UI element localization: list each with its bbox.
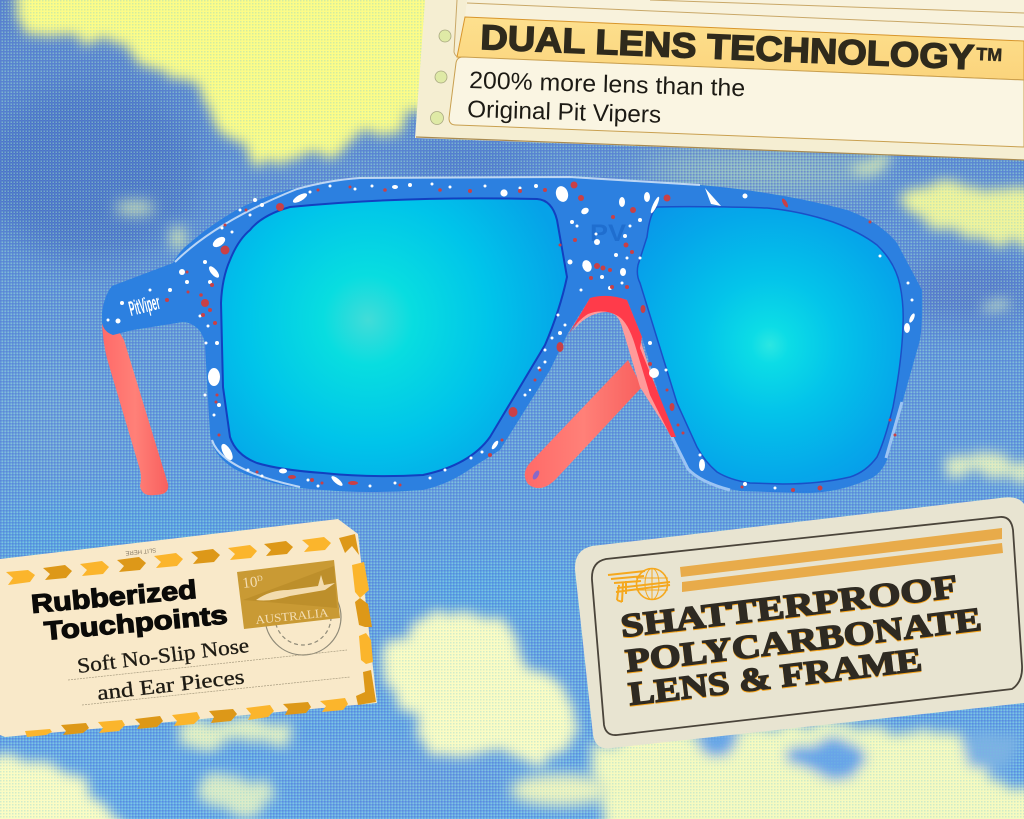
gold stripes	[680, 528, 1003, 592]
sunglasses: PitViper	[127, 291, 162, 321]
far temple arm	[525, 360, 642, 488]
ticket paper	[415, 0, 1024, 160]
white splatter	[106, 182, 916, 490]
envelope top flap text: SLIT HERE	[125, 546, 156, 555]
envelope description	[76, 633, 250, 705]
envelope description: and Ear Pieces	[96, 664, 246, 705]
yellow title band	[457, 17, 1024, 80]
envelope ruled lines	[68, 650, 350, 705]
nose piece, red	[568, 296, 676, 437]
label heading shadow: LENS & FRAME	[627, 643, 924, 714]
ticket card: dual lens technology	[415, 0, 1024, 160]
label card: shatterproof polycarbonate	[575, 497, 1024, 748]
ticket heading: DUAL LENS TECHNOLOGY	[480, 18, 975, 77]
envelope card: rubberized touchpoints	[0, 519, 377, 737]
stamp: D	[256, 574, 263, 583]
envelope paper	[0, 519, 377, 737]
lower text panel	[449, 57, 1024, 147]
ear piece tip	[531, 469, 541, 481]
envelope heading: Touchpoints	[43, 599, 229, 646]
sunglasses	[102, 177, 922, 495]
envelope description: Soft No-Slip Nose	[76, 633, 250, 678]
stamp: AUSTRALIA	[255, 605, 329, 627]
label heading	[619, 569, 983, 713]
right lens	[637, 207, 903, 484]
label heading shadow: POLYCARBONATE	[624, 603, 983, 681]
label heading shadow: SHATTERPROOF	[619, 570, 960, 646]
label heading: SHATTERPROOF	[619, 569, 960, 645]
label heading shadow	[619, 570, 983, 714]
postmark	[265, 579, 341, 655]
frame highlight	[175, 177, 700, 487]
label heading: LENS & FRAME	[627, 642, 924, 713]
globe logo	[608, 568, 670, 602]
trademark: TM	[976, 44, 1003, 65]
label inner border	[592, 517, 1022, 735]
punch holes	[430, 30, 451, 124]
left lens	[221, 198, 567, 476]
red splatter	[165, 182, 896, 492]
label paper	[575, 497, 1024, 748]
frame lower-right highlight	[671, 402, 902, 490]
label heading: POLYCARBONATE	[624, 602, 983, 680]
stamp: 10	[242, 574, 258, 592]
stamp	[237, 560, 340, 629]
plane	[256, 575, 335, 600]
ticket description: 200% more lens than the	[469, 67, 746, 102]
near temple ear piece	[102, 320, 168, 495]
ticket aged bottom edge	[416, 137, 1024, 160]
envelope heading	[30, 574, 229, 646]
ticket description	[467, 67, 746, 129]
frame	[102, 177, 922, 493]
embossed PV logo: PV	[590, 220, 626, 247]
ticket description: Original Pit Vipers	[467, 96, 662, 129]
far limb of nose piece, pink	[572, 302, 671, 436]
airmail chevrons	[6, 534, 376, 737]
envelope heading: Rubberized	[30, 574, 198, 619]
ticket top ruled area	[465, 0, 1024, 41]
